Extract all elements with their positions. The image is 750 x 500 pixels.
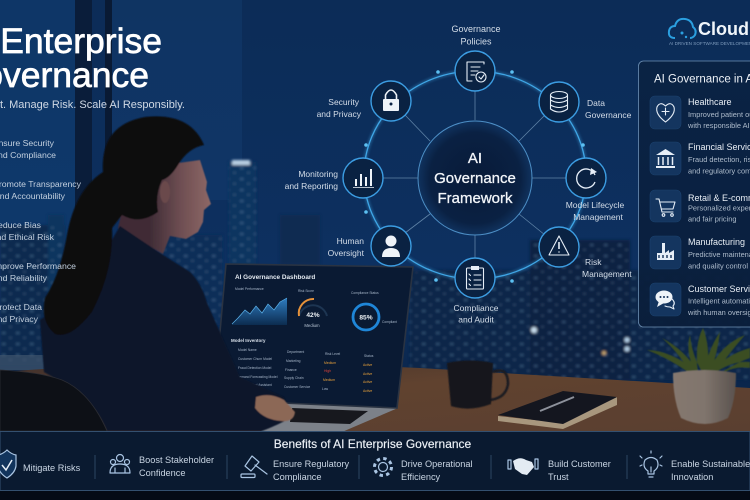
model inventory table: Fraud Detection Model [238,366,272,370]
laptop base [248,400,398,432]
node: governance policies: Governance [451,24,501,34]
item: healthcare [650,96,750,130]
node: governance policies: Policies [460,36,492,46]
item: manufacturing: and quality control [688,262,748,270]
node: monitoring and reporting [285,158,383,198]
model inventory table: High [324,369,331,373]
benefit: ensure regulatory compliance: Compliance [273,472,322,482]
model inventory table: Low [322,387,329,391]
node: monitoring and reporting: and Reporting [285,181,338,191]
model inventory table: Customer Churn Model [238,357,272,361]
node: human oversight [328,226,411,266]
AI governance framework diagram [285,24,632,324]
benefit: boost stakeholder confidence [110,454,214,478]
model inventory table: Demand Forecasting Model [237,375,278,379]
compliance donut: 85% [359,314,373,322]
spokes [383,91,566,258]
key goals list [0,138,82,324]
model performance chart: Model Performance [235,287,264,291]
node: data governance [539,82,632,122]
risk score gauge: 42% [306,312,320,319]
benefit: build customer trust: Build Customer [548,459,611,469]
node: model lifecycle management: Model Lifecycle [566,200,625,210]
node: monitoring and reporting: Monitoring [298,169,338,179]
dashboard title: AI Governance Dashboard [235,274,315,281]
outer ring [364,71,586,279]
model inventory table: Model Inventory [231,338,266,343]
node: risk management [539,227,632,279]
risk score gauge [298,289,327,328]
item: healthcare: Healthcare [688,97,732,107]
model performance chart [232,287,287,325]
central hub [418,121,532,235]
risk score gauge: Risk Score [298,289,314,293]
node: risk management: Management [582,269,632,279]
risk score gauge: Medium [304,323,320,328]
node: security and privacy: Security [328,97,360,107]
model inventory table: Model Name [238,348,257,352]
panel: AI governance in action [638,61,750,327]
laptop [214,264,413,432]
node: risk management: Risk [585,257,602,267]
model inventory table: AI Chatbot Assistant [242,383,272,387]
benefit: drive operational efficiency [374,458,472,482]
compliance donut: Compliant [382,320,397,324]
benefit: boost stakeholder confidence: Confidence [139,468,185,478]
benefit: boost stakeholder confidence: Boost Stakeholder [139,455,214,465]
benefit: drive operational efficiency: Drive Operational [401,459,472,469]
hair [44,116,204,335]
node: compliance and audit [454,258,499,324]
node: model lifecycle management: Management [573,212,623,222]
benefit: build customer trust [508,458,611,482]
coffee mug [447,360,508,409]
potted plant [647,328,750,424]
model inventory table: Medium [323,378,335,382]
page title [0,21,162,95]
model inventory table: Risk Level [325,352,340,356]
node: data governance: Data [587,98,605,108]
chair [0,370,107,431]
item: customer service [650,283,750,317]
node: human oversight: Oversight [328,248,365,258]
benefit: mitigate risks: Mitigate Risks [23,463,81,473]
central hub: Governance [434,170,516,187]
compliance donut [351,291,397,330]
benefit: ensure regulatory compliance [241,456,349,482]
keyboard [290,408,368,424]
benefit: enable sustainable innovation: Innovation [671,472,713,482]
node: data governance: Governance [585,110,632,120]
benefit: enable sustainable innovation [640,451,750,482]
benefit: ensure regulatory compliance: Ensure Regulatory [273,459,349,469]
model inventory table: Department [287,350,304,354]
jacket [40,226,292,431]
model inventory table: Medium [324,361,336,365]
item: manufacturing: Manufacturing [688,237,745,247]
benefit: drive operational efficiency: Efficiency [401,472,441,482]
model inventory table: Supply Chain [284,376,304,380]
benefit: build customer trust: Trust [548,472,569,482]
laptop screen [214,264,413,408]
node: security and privacy: and Privacy [317,109,362,119]
ear [160,181,170,203]
logo [669,19,750,46]
node: human oversight: Human [337,236,364,246]
node: security and privacy [317,81,411,121]
model inventory table: Active [363,363,372,367]
central hub: AI [468,150,482,167]
neck and face [118,160,211,254]
window frames [75,0,92,300]
item: retail and e-commerce: and fair pricing [688,214,736,224]
model inventory table: Active [363,389,372,393]
node: governance policies [451,24,501,91]
item: manufacturing [650,236,750,270]
model inventory table: Marketing [286,359,301,363]
ring dots [364,70,585,283]
model inventory table: Finance [285,368,297,372]
model inventory table: Active [363,380,372,384]
compliance donut: Compliance Status [351,291,379,295]
node: model lifecycle management [566,158,625,222]
item: financial services [650,142,750,176]
woman from behind [40,116,295,431]
item: retail and e-commerce [650,190,750,224]
node: compliance and audit: and Audit [458,314,494,324]
footer: benefits band [0,432,750,500]
central hub: Framework [437,190,513,207]
model inventory table: Customer Service [284,385,310,389]
model inventory table: Active [363,372,372,376]
model inventory table [231,338,374,393]
notebook and pen [498,391,617,429]
benefit: mitigate risks [0,450,81,478]
logo: Cloud [698,19,749,39]
benefit: enable sustainable innovation: Enable Sustainable [671,459,750,469]
node: compliance and audit: Compliance [454,303,499,313]
item: healthcare: with responsible AI [687,121,750,130]
hand [255,395,295,421]
model inventory table: Status [364,354,374,358]
desk [0,358,750,432]
benefits heading: Benefits of AI Enterprise Governance [274,437,472,451]
